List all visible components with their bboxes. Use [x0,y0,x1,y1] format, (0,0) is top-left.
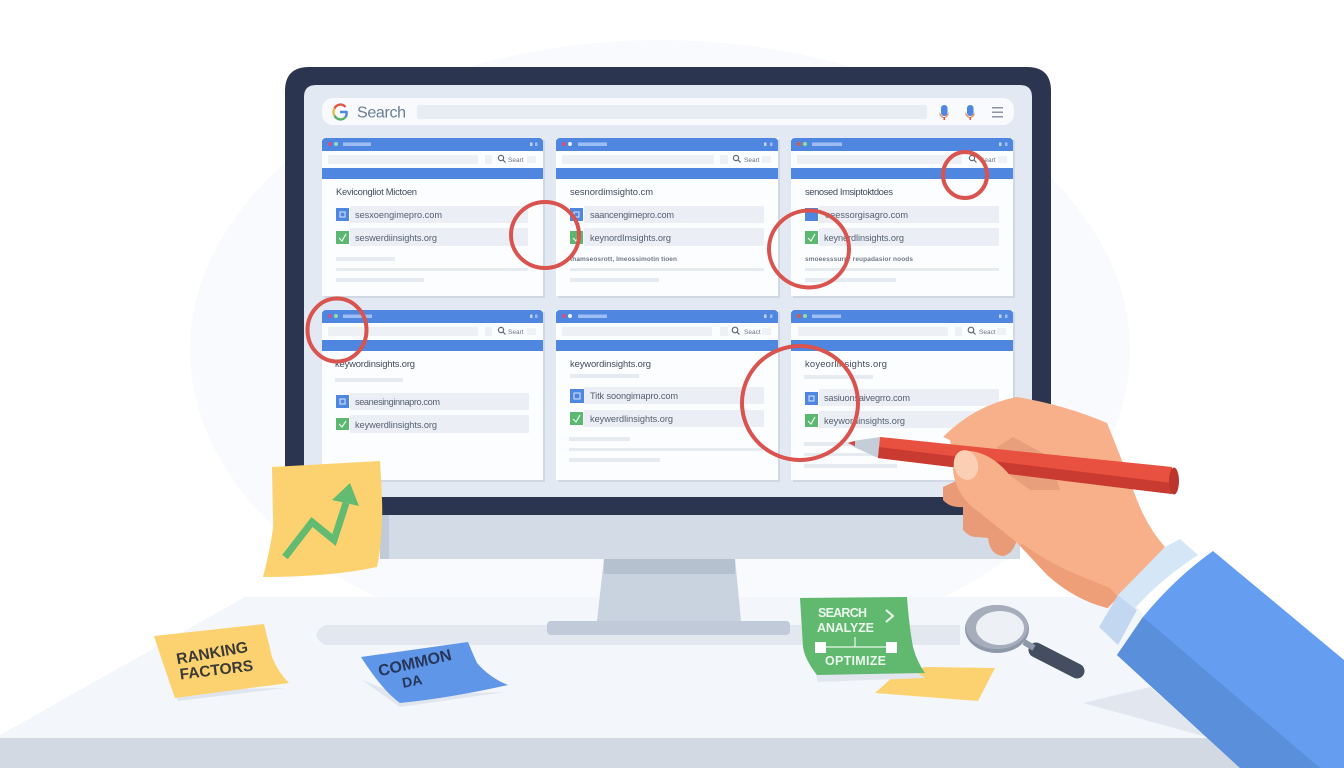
panel: result card 4: keywerdlinsights.org [355,420,437,430]
monitor frame [285,67,1051,515]
monitor chin [380,510,1020,559]
panel: result card 2: saancengimepro.com [590,210,674,220]
shirt cuff [1099,539,1198,645]
panel: result card 3: ueessorgisagro.com [825,210,908,220]
panel: result card 4: seanesinginnapro.com [355,397,440,407]
sticky note: flat yellow [875,667,995,701]
panel: result card 1: Kevicongliot Mictoen [336,186,417,197]
panel: result card 2 [556,138,780,298]
panel: result card 1: sesxoengimepro.com [355,210,442,220]
panel: result card 6: koyeorlinsights.org [805,358,887,369]
panel: result card 6 [791,310,1015,482]
sticky note: search analyze optimize [800,597,925,682]
red annotation circles [308,152,987,460]
panel: result card 6: keywordinsights.org [824,416,905,426]
monitor [285,67,1051,645]
panel: result card 1: Seart [508,157,524,164]
panel: result card 3: senosed Imsiptoktdoes [805,186,893,197]
sticky note: common DA: DA [401,671,424,691]
sticky note: search analyze optimize: ANALYZE [817,621,874,635]
panel: result card 4 [322,310,545,482]
icon: menu [992,107,1003,118]
panel: result card 5 [556,310,780,482]
panel: result card 2: thamseosrott, Imeossimotin tioen [570,256,677,263]
pencil [848,437,1179,494]
pencil shadow [997,437,1060,490]
palm [943,397,1165,608]
panel: result card 3 [791,138,1015,298]
panel: result card 4: keywordinsights.org [335,358,415,369]
panel: result card 1: seswerdiinsights.org [355,233,437,243]
panel: result card 1 [322,138,545,298]
search label: Search [357,104,406,122]
fingers [943,470,1050,556]
panel: result card 4: Seart [508,329,524,336]
icon: magnifying glass [965,605,1077,671]
panel: result card 5: keywerdlinsights.org [590,414,673,424]
sticky note: common DA [361,642,508,707]
sticky note: ranking factors: RANKING [175,639,249,668]
screen [304,85,1032,497]
sticky note: search analyze optimize: OPTIMIZE [825,654,886,668]
panel: result card 3: smoeesssurpr reupadasior noods [805,256,913,263]
panel: result card 2: sesnordimsighto.cm [570,186,653,197]
hand with pencil [848,397,1179,608]
icon: google G [333,105,347,119]
desk [0,597,1260,768]
panel: result card 5: Seact [744,329,761,336]
thumb [953,451,1032,545]
monitor stand [316,558,960,645]
wrist shade [1010,535,1118,608]
panel: result card 5: keywordinsights.org [570,358,651,369]
panel: result card 6: Seact [979,329,996,336]
icon: microphone [966,105,974,120]
panel: result card 2: keynordImsights.org [590,233,671,243]
sticky note: common DA: COMMON [377,647,453,680]
jacket sleeve [1117,551,1344,768]
sticky note: ranking factors: FACTORS [179,658,254,683]
panel: result card 3: Seart [980,157,996,164]
panel: result card 3: keynerdlinsights.org [824,233,904,243]
panel: result card 5: Titk soongimapro.com [590,391,678,401]
icon: microphone [940,105,948,120]
sticky note: growth arrow [263,461,382,577]
sticky note: search analyze optimize: SEARCH [818,606,867,620]
search bar [322,98,1014,125]
thumb nail [951,447,981,483]
panel: result card 6: sasiuonsaivegrro.com [824,393,910,403]
panel: result card 2: Seart [744,157,760,164]
sticky note: ranking factors [154,624,289,701]
